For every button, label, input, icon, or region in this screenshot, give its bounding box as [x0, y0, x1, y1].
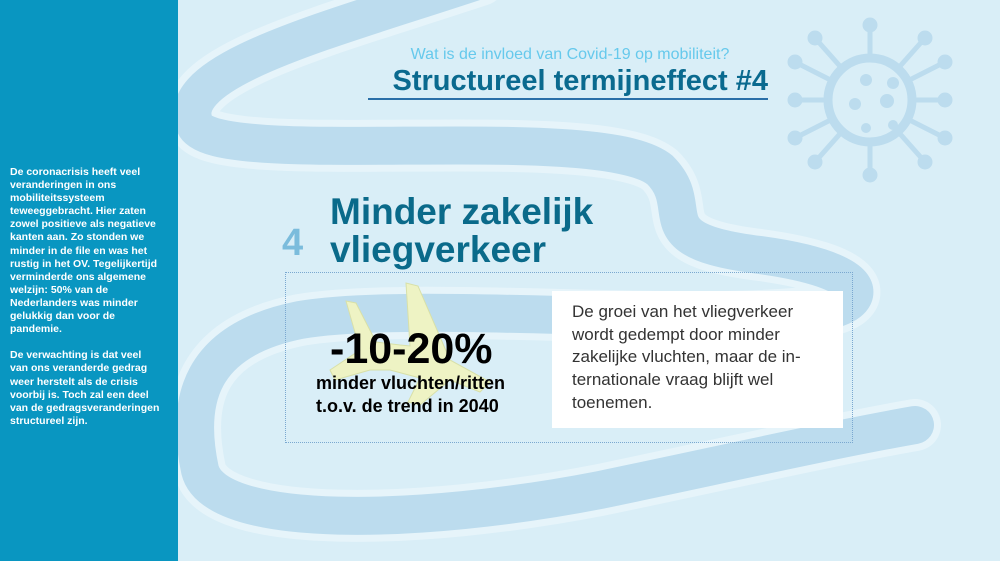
sidebar text: pandemie. — [10, 323, 62, 335]
text box: wordt gedempt door minder — [572, 325, 780, 344]
sidebar text: mobiliteitssysteem — [10, 192, 105, 204]
sidebar text: minder in de file en was het — [10, 245, 147, 257]
sidebar text: rustig in het OV. Tegelijkertijd — [10, 258, 157, 270]
heading: Minder zakelijk — [330, 191, 593, 232]
sidebar text: De verwachting is dat veel — [10, 349, 141, 361]
stat — [316, 325, 505, 416]
text box: toenemen. — [572, 393, 652, 412]
sidebar text: De coronacrisis heeft veel — [10, 166, 140, 178]
icon: airplane — [330, 282, 490, 406]
sidebar text: voorbij is. Toch zal een deel — [10, 389, 149, 401]
panel: dotted box — [285, 272, 853, 443]
text box: De groei van het vliegverkeer — [572, 302, 793, 321]
text box: ternationale vraag blijft wel — [572, 370, 773, 389]
stat label: t.o.v. de trend in 2040 — [316, 396, 499, 416]
stat: -10-20% — [330, 325, 493, 373]
sidebar text: structureel zijn. — [10, 415, 88, 427]
number 4: 4 — [282, 222, 303, 264]
heading — [330, 191, 594, 270]
sidebar text: veranderingen in ons — [10, 179, 116, 191]
text box: zakelijke vluchten, maar de in- — [572, 347, 801, 366]
title: Structureel termijneffect #4 — [392, 65, 768, 97]
sidebar text: kanten aan. Zo stonden we — [10, 231, 144, 243]
sidebar text: Nederlanders was minder — [10, 297, 138, 309]
stat label — [316, 373, 505, 416]
sidebar text: zowel positieve als negatieve — [10, 218, 156, 230]
sidebar text: van ons veranderde gedrag — [10, 362, 147, 374]
sidebar text: teweeggebracht. Hier zaten — [10, 205, 146, 217]
sidebar text: verminderde ons algemene — [10, 271, 146, 283]
sidebar text — [10, 166, 159, 427]
stat label: minder vluchten/ritten — [316, 373, 505, 393]
sidebar text: weer herstelt als de crisis — [10, 376, 138, 388]
icon: virus — [788, 18, 952, 182]
sidebar text: welzijn: 50% van de — [10, 284, 108, 296]
sidebar text: van de gedragsveranderingen — [10, 402, 159, 414]
sidebar text: gelukkig dan voor de — [10, 310, 115, 322]
sidebar — [0, 0, 178, 561]
subtitle: Wat is de invloed van Covid-19 op mobiliteit? — [411, 46, 729, 63]
heading: vliegverkeer — [330, 229, 546, 270]
text box — [552, 291, 843, 428]
